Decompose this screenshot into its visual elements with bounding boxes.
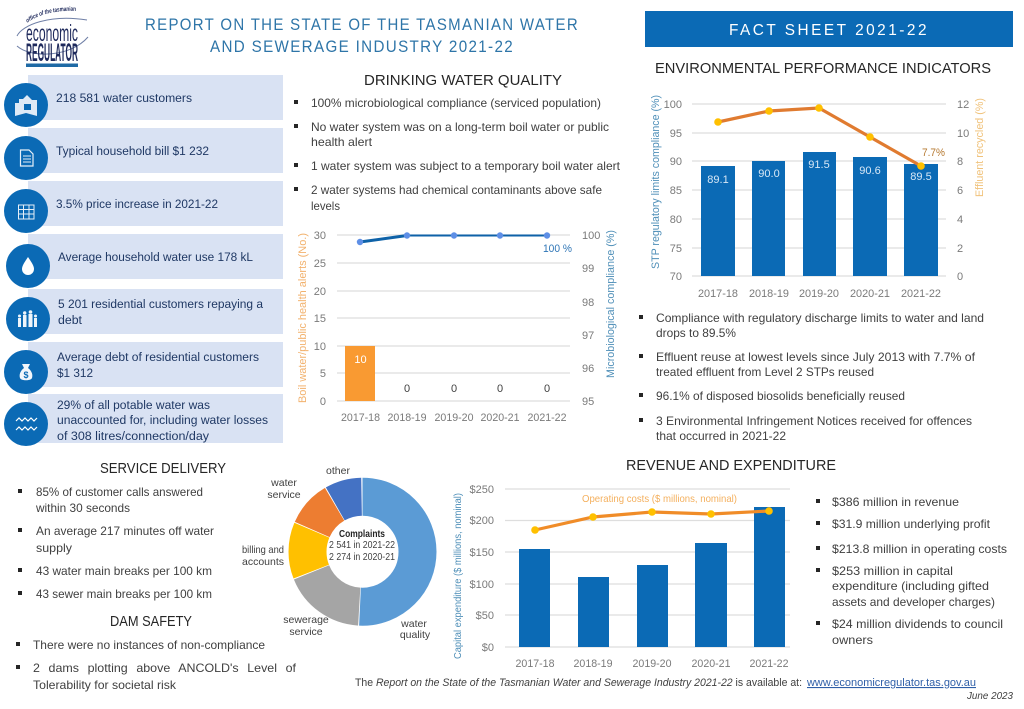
chart: STP compliance and effluent recycled: 89.1 (707, 174, 729, 186)
text block: environmental bullets: Compliance with regulatory discharge limits to water and land (656, 311, 984, 325)
chart: STP compliance and effluent recycled: 91.5 (808, 159, 830, 171)
stat: customers repaying a debt: debt (58, 313, 83, 327)
stat: average debt: Average debt of residential customers (57, 350, 259, 364)
chart: STP compliance and effluent recycled: 90.0 (758, 168, 780, 180)
chart: boil water alerts and microbiological compliance: 0 (404, 383, 410, 395)
chart: capital expenditure and operating costs: $250 (470, 484, 494, 496)
chart: STP compliance and effluent recycled: 95 (670, 128, 682, 140)
chart: capital expenditure and operating costs: 2021-22 (750, 658, 788, 670)
chart: STP compliance and effluent recycled: 2020-21 (850, 288, 890, 300)
stat: customers repaying a debt: 5 201 residential customers repaying a (58, 297, 263, 311)
chart: STP compliance and effluent recycled: 10 (957, 128, 969, 140)
chart: capital expenditure and operating costs: $200 (470, 515, 494, 527)
text block: service delivery bullets: supply (36, 541, 72, 555)
text block: service delivery bullets (18, 485, 214, 601)
text block: drinking water quality bullets: No water system was on a long-term boil water or public (311, 120, 609, 134)
chart: STP compliance and effluent recycled: 75 (670, 243, 682, 255)
chart: boil water alerts and microbiological compliance: 30 (314, 230, 326, 242)
stat: unaccounted water: of 308 litres/connection/day (57, 429, 210, 443)
chart: boil water alerts and microbiological compliance: 25 (314, 258, 326, 270)
footer: availability note: www.economicregulator.tas.gov.au (806, 677, 976, 689)
chart: complaints donut: 2 274 in 2020-21 (329, 551, 395, 563)
chart: boil water alerts and microbiological compliance: 97 (582, 330, 594, 342)
chart: STP compliance and effluent recycled: STP regulatory limits compliance (%) (650, 95, 662, 269)
stat: price increase (4, 181, 283, 233)
chart: STP compliance and effluent recycled: 0 (957, 271, 963, 283)
chart: complaints donut: billing and (242, 544, 284, 556)
text block: drinking water quality bullets: levels (311, 199, 340, 213)
stat: water customers (4, 75, 283, 127)
text block: revenue bullets (816, 495, 1007, 647)
chart: capital expenditure and operating costs: $100 (470, 579, 494, 591)
chart: boil water alerts and microbiological compliance: 100 (582, 230, 600, 242)
chart: complaints donut: Complaints (339, 528, 385, 540)
heading: revenue and expenditure: REVENUE AND EXPENDITURE (626, 457, 836, 474)
chart: capital expenditure and operating costs: Capital expenditure ($ millions, nominal) (453, 493, 464, 659)
chart: complaints donut (242, 465, 431, 641)
chart: capital expenditure and operating costs: $50 (476, 610, 494, 622)
chart: boil water alerts and microbiological compliance: 0 (544, 383, 550, 395)
chart: complaints donut: service (267, 489, 301, 501)
chart: complaints donut: water (400, 618, 427, 630)
stat: price increase: 3.5% price increase in 2021-22 (56, 197, 218, 211)
text block: drinking water quality bullets: 2 water systems had chemical contaminants above safe (311, 183, 602, 197)
chart: boil water alerts and microbiological compliance: 96 (582, 363, 594, 375)
text block: revenue bullets: $386 million in revenue (832, 495, 959, 509)
text block: revenue bullets: assets and developer charges) (832, 595, 995, 609)
stat: unaccounted water (4, 394, 283, 446)
chart: STP compliance and effluent recycled: 85 (670, 185, 682, 197)
footer: availability note: The Report on the State of the Tasmanian Water and Sewerage Industry 2021-22 is available at: (355, 677, 802, 689)
chart: complaints donut: sewerage (283, 614, 329, 626)
text block: service delivery bullets: within 30 seconds (35, 501, 130, 515)
chart: STP compliance and effluent recycled: 80 (670, 214, 682, 226)
chart: boil water alerts and microbiological compliance: 2019-20 (434, 412, 474, 424)
chart: boil water alerts and microbiological compliance: Boil water/public health alerts (No.) (297, 233, 309, 403)
chart: STP compliance and effluent recycled: 100 (664, 99, 682, 111)
chart: STP compliance and effluent recycled: 90 (670, 156, 682, 168)
chart: boil water alerts and microbiological compliance (297, 230, 617, 424)
panel: key statistics (4, 75, 283, 446)
stat: household bill (4, 128, 283, 180)
text block: revenue bullets: $31.9 million underlying profit (832, 517, 991, 531)
chart: STP compliance and effluent recycled: 2019-20 (799, 288, 839, 300)
text block: environmental bullets: treated effluent from Level 2 STPs reused (656, 365, 874, 379)
text block: service delivery bullets: 43 sewer main breaks per 100 km (36, 587, 212, 601)
fact sheet banner (645, 11, 1013, 47)
chart: STP compliance and effluent recycled: 7.7% (922, 147, 945, 159)
text block: dam safety bullets: 2 dams plotting above ANCOLD's Level of (33, 661, 297, 675)
chart: STP compliance and effluent recycled: 6 (957, 185, 963, 197)
chart: STP compliance and effluent recycled: 2018-19 (749, 288, 789, 300)
chart: complaints donut: quality (400, 629, 431, 641)
text block: dam safety bullets: There were no instances of non-compliance (33, 638, 265, 652)
text block: revenue bullets: $213.8 million in operating costs (832, 542, 1007, 556)
chart: STP compliance and effluent recycled: 12 (957, 99, 969, 111)
text block: service delivery bullets: 85% of customer calls answered (36, 485, 203, 499)
chart: STP compliance and effluent recycled: 4 (957, 214, 963, 226)
text block: environmental bullets: Effluent reuse at lowest levels since July 2013 with 7.7% of (656, 350, 976, 364)
chart: STP compliance and effluent recycled: 8 (957, 156, 963, 168)
stat: water customers: 218 581 water customers (56, 91, 192, 105)
chart: STP compliance and effluent recycled: Effluent recycled (%) (974, 98, 986, 197)
text block: revenue bullets: owners (832, 633, 873, 647)
text block: dam safety bullets (16, 638, 297, 692)
text block: revenue bullets: expenditure (including gifted (832, 579, 989, 593)
footer: availability note: June 2023 (966, 690, 1013, 702)
heading: environmental performance indicators: ENVIRONMENTAL PERFORMANCE INDICATORS (655, 60, 991, 77)
chart: boil water alerts and microbiological compliance: 5 (320, 368, 326, 380)
chart: boil water alerts and microbiological compliance: 20 (314, 286, 326, 298)
chart: capital expenditure and operating costs: 2019-20 (632, 658, 672, 670)
chart: boil water alerts and microbiological compliance: 2021-22 (528, 412, 566, 424)
chart: boil water alerts and microbiological compliance: 99 (582, 263, 594, 275)
chart: boil water alerts and microbiological compliance: 2020-21 (480, 412, 520, 424)
text block: drinking water quality bullets: health alert (311, 135, 373, 149)
text block: drinking water quality bullets (294, 96, 621, 213)
text block: revenue bullets: $253 million in capital (832, 564, 953, 578)
chart: STP compliance and effluent recycled: 2017-18 (698, 288, 738, 300)
stat: unaccounted water: 29% of all potable water was (57, 398, 210, 412)
chart: complaints donut: other (326, 465, 350, 477)
chart: boil water alerts and microbiological compliance: 95 (582, 396, 594, 408)
text block: drinking water quality bullets: 1 water system was subject to a temporary boil water alert (311, 159, 621, 173)
chart: boil water alerts and microbiological compliance: 15 (314, 313, 326, 325)
chart: complaints donut: water (270, 477, 297, 489)
fact sheet banner: FACT SHEET 2021-22 (729, 22, 929, 39)
chart: capital expenditure and operating costs: Operating costs ($ millions, nominal) (582, 493, 737, 505)
stat: average debt (4, 342, 283, 394)
stat: household bill: Typical household bill $1 232 (56, 144, 209, 158)
chart: boil water alerts and microbiological compliance: 0 (497, 383, 503, 395)
stat: water use (6, 234, 283, 288)
stat: average debt: $ (23, 370, 29, 380)
text block: environmental bullets: that occurred in 2021-22 (656, 429, 786, 443)
chart: boil water alerts and microbiological compliance: 98 (582, 297, 594, 309)
stat: unaccounted water: unaccounted for, including water losses (57, 413, 268, 427)
footer: availability note (355, 677, 1013, 702)
text block: drinking water quality bullets: 100% microbiological compliance (serviced population) (311, 96, 601, 110)
chart: capital expenditure and operating costs: $0 (482, 642, 494, 654)
title: AND SEWERAGE INDUSTRY 2021-22 (210, 37, 514, 56)
title: REPORT ON THE STATE OF THE TASMANIAN WATER (145, 15, 579, 34)
chart: capital expenditure and operating costs: 2017-18 (516, 658, 554, 670)
logo: Office of the Tasmanian Economic Regulator: office of the tasmanian (26, 6, 76, 22)
stat: average debt: $1 312 (57, 366, 93, 380)
text block: dam safety bullets: Tolerability for societal risk (33, 678, 177, 692)
chart: STP compliance and effluent recycled: 90.6 (859, 165, 881, 177)
text block: environmental bullets: drops to 89.5% (656, 326, 736, 340)
text block: service delivery bullets: An average 217 minutes off water (36, 524, 214, 538)
title (145, 15, 579, 56)
chart: boil water alerts and microbiological compliance: 100 % (543, 243, 572, 255)
text block: revenue bullets: $24 million dividends to council (832, 617, 1003, 631)
chart: boil water alerts and microbiological compliance: Microbiological compliance (%) (605, 230, 617, 378)
text block: environmental bullets: 3 Environmental Infringement Notices received for offences (656, 414, 972, 428)
chart: complaints donut: accounts (242, 556, 284, 568)
text block: environmental bullets: 96.1% of disposed biosolids beneficially reused (656, 389, 905, 403)
chart: STP compliance and effluent recycled: 2021-22 (901, 288, 941, 300)
chart: capital expenditure and operating costs: 2020-21 (692, 658, 730, 670)
text block: service delivery bullets: 43 water main breaks per 100 km (36, 564, 212, 578)
chart: STP compliance and effluent recycled: 2 (957, 243, 963, 255)
chart: boil water alerts and microbiological compliance: 10 (314, 341, 326, 353)
stat: customers repaying a debt (6, 289, 283, 341)
chart: STP compliance and effluent recycled: 89.5 (910, 171, 932, 183)
logo: Office of the Tasmanian Economic Regulator (16, 6, 88, 67)
chart: boil water alerts and microbiological compliance: 2018-19 (388, 412, 426, 424)
chart: capital expenditure and operating costs (453, 484, 790, 670)
text: REGULATOR (26, 39, 78, 67)
chart: complaints donut: 2 541 in 2021-22 (329, 539, 395, 551)
stat: water use: Average household water use 178 kL (58, 250, 253, 264)
chart: boil water alerts and microbiological compliance: 10 (354, 354, 367, 366)
heading: drinking water quality: DRINKING WATER QUALITY (364, 72, 562, 89)
chart: boil water alerts and microbiological compliance: 0 (451, 383, 457, 395)
chart: capital expenditure and operating costs: 2018-19 (574, 658, 612, 670)
logo: Office of the Tasmanian Economic Regulator: economic (26, 20, 78, 46)
heading: dam safety: DAM SAFETY (110, 613, 192, 630)
chart: STP compliance and effluent recycled (650, 95, 986, 300)
heading: service delivery: SERVICE DELIVERY (100, 460, 226, 477)
chart: STP compliance and effluent recycled: 70 (670, 271, 682, 283)
chart: boil water alerts and microbiological compliance: 2017-18 (341, 412, 380, 424)
text block: environmental bullets (639, 311, 984, 443)
chart: boil water alerts and microbiological compliance: 0 (320, 396, 326, 408)
chart: capital expenditure and operating costs: $150 (470, 547, 494, 559)
chart: complaints donut: service (289, 626, 323, 638)
